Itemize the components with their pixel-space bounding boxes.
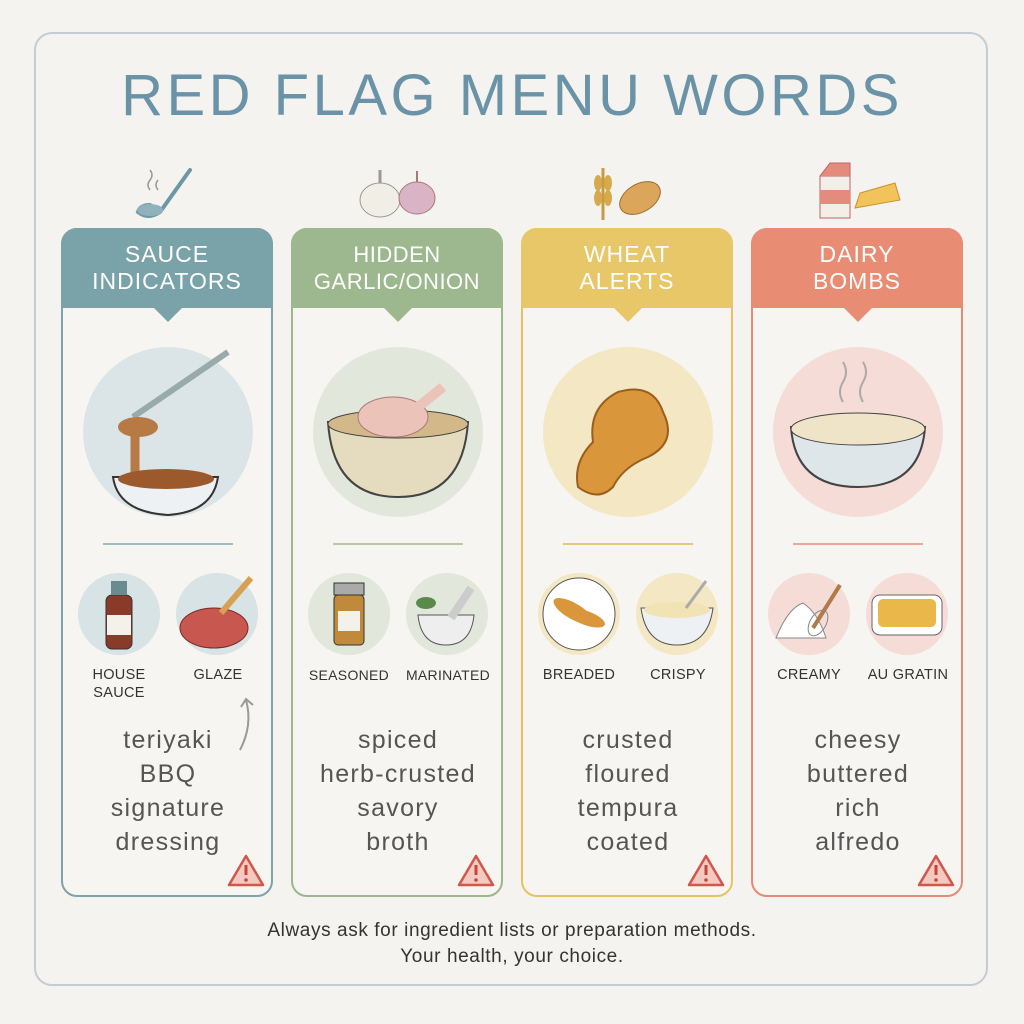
illustration: fried chicken — [543, 347, 713, 517]
text: words: buttered — [807, 760, 909, 788]
heading — [291, 228, 503, 308]
text: words — [807, 726, 909, 856]
icon: crispy bowl — [636, 573, 718, 655]
text: words: dressing — [116, 828, 220, 856]
panel: sauce indicators: GLAZE — [193, 667, 243, 683]
footer text: Your health, your choice. — [400, 946, 624, 967]
panel: hidden garlic/onion: SEASONED — [309, 667, 389, 683]
text: words: teriyaki — [123, 726, 213, 754]
icon: warning — [688, 854, 724, 886]
title: RED FLAG MENU WORDS — [121, 63, 903, 128]
panel: sauce indicators — [61, 228, 273, 897]
heading: INDICATORS — [92, 268, 242, 294]
icon: ladle — [136, 168, 192, 218]
heading: DAIRY — [820, 241, 894, 267]
panel: dairy bombs: CREAMY — [777, 667, 841, 683]
icon: wheat bread — [594, 168, 661, 220]
text: words: rich — [835, 794, 881, 822]
heading: HIDDEN — [353, 242, 441, 267]
footer text — [267, 920, 757, 967]
panel: wheat alerts: CRISPY — [650, 667, 706, 683]
icon: breaded tenders — [538, 573, 620, 655]
text: words: savory — [357, 794, 439, 822]
text: words: signature — [111, 794, 225, 822]
heading — [751, 228, 963, 308]
icon: au gratin — [866, 573, 948, 655]
panel: sauce indicators: HOUSE — [92, 667, 146, 683]
heading: SAUCE — [125, 241, 209, 267]
text: words — [578, 726, 678, 856]
text: words: herb-crusted — [320, 760, 476, 788]
panel: dairy bombs — [751, 228, 963, 897]
illustration: sauce spoon bowl — [83, 347, 253, 517]
icon: whipped cream — [768, 573, 850, 655]
illustration: creamy soup — [773, 347, 943, 517]
icon: glaze — [176, 573, 258, 655]
panel: wheat alerts: BREADED — [543, 667, 615, 683]
heading: BOMBS — [813, 268, 901, 294]
text: words: cheesy — [814, 726, 902, 754]
panel: dairy bombs: AU GRATIN — [868, 667, 948, 683]
text: words — [111, 726, 225, 856]
icon: garlic onion — [360, 170, 436, 218]
icon: spice jar — [308, 573, 390, 655]
panel: hidden garlic/onion: MARINATED — [406, 667, 490, 683]
icon: bottle — [78, 573, 160, 655]
heading — [521, 228, 733, 308]
text: words: tempura — [578, 794, 678, 822]
footer text: Always ask for ingredient lists or preparation methods. — [267, 920, 757, 941]
heading — [61, 228, 273, 308]
icon: warning — [458, 854, 494, 886]
text: words: broth — [366, 828, 430, 856]
icon: warning — [228, 854, 264, 886]
text: words: coated — [587, 828, 669, 856]
panel: hidden garlic/onion — [291, 228, 503, 897]
icon: mortar — [406, 573, 488, 655]
arrow — [239, 698, 254, 750]
heading: GARLIC/ONION — [314, 269, 480, 294]
text: words: alfredo — [815, 828, 901, 856]
text: words — [320, 726, 476, 856]
text: words: crusted — [582, 726, 674, 754]
text: words: floured — [585, 760, 671, 788]
icon: warning — [918, 854, 954, 886]
icon: milk cheese — [820, 162, 901, 218]
panel: wheat alerts — [521, 228, 733, 897]
panel: sauce indicators: SAUCE — [93, 685, 145, 701]
text: words: spiced — [358, 726, 438, 754]
text: words: BBQ — [140, 760, 196, 788]
illustration: chicken bowl — [313, 347, 483, 517]
heading: ALERTS — [579, 268, 675, 294]
heading: WHEAT — [584, 241, 670, 267]
